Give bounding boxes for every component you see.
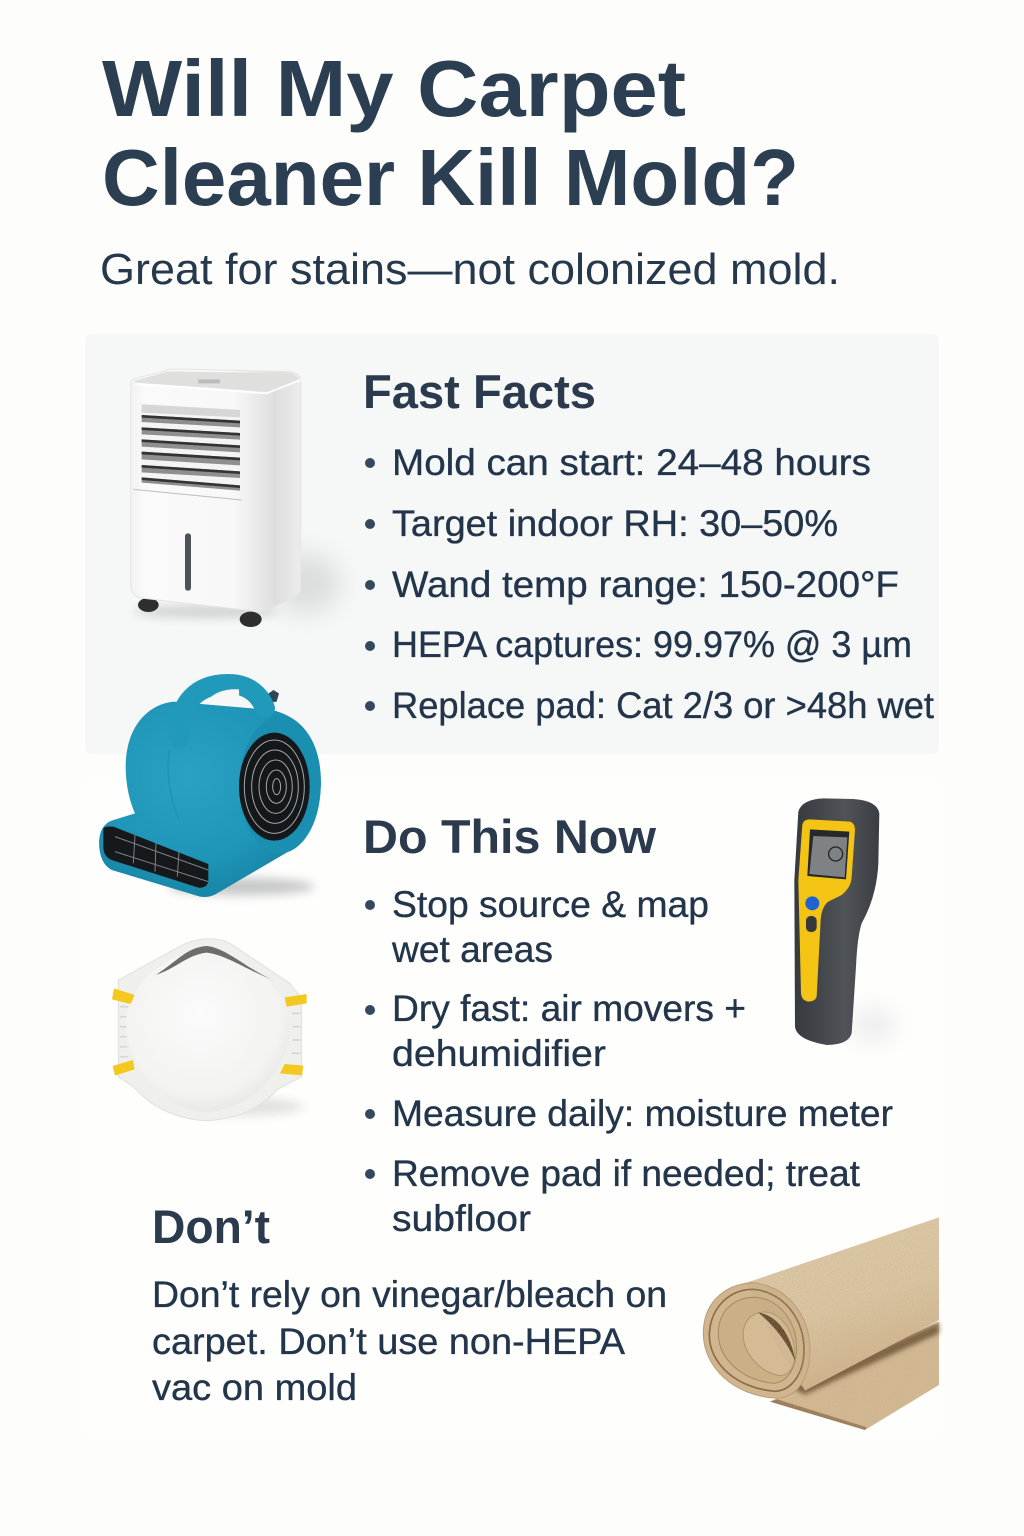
list: fast facts: Wand temp range: 150-200°F (392, 564, 899, 605)
panel: fast facts (85, 334, 939, 754)
subtitle: Great for stains—not colonized mold. (100, 245, 840, 294)
list: do this now: wet areas (391, 929, 553, 970)
title: Cleaner Kill Mold? (102, 133, 799, 222)
list: do this now: Remove pad if needed; treat (392, 1153, 861, 1194)
heading: don't: Don’t (152, 1200, 270, 1253)
list: fast facts: Target indoor RH: 30–50% (392, 503, 838, 544)
icon: air mover (99, 684, 321, 897)
icon: dehumidifier (131, 369, 340, 627)
text: don't: Don’t rely on vinegar/bleach on (152, 1274, 667, 1315)
text: don't (152, 1274, 667, 1408)
list: do this now: dehumidifier (392, 1033, 606, 1074)
list: do this now: Stop source & map (392, 884, 709, 925)
list: fast facts: HEPA captures: 99.97% @ 3 µm (392, 624, 912, 665)
list: fast facts: Replace pad: Cat 2/3 or >48h wet (392, 685, 935, 726)
title (102, 44, 799, 222)
list: do this now: subfloor (392, 1198, 531, 1239)
heading: do this now: Do This Now (363, 810, 656, 863)
icon: carpet roll (703, 1217, 939, 1430)
icon: respirator mask (112, 939, 307, 1121)
text: don't: carpet. Don’t use non-HEPA (152, 1321, 625, 1362)
list: fast facts (365, 442, 935, 726)
list: do this now (365, 884, 893, 1239)
title: Will My Carpet (102, 44, 686, 133)
list: fast facts: Mold can start: 24–48 hours (392, 442, 871, 483)
text: don't: vac on mold (152, 1367, 357, 1408)
icon: moisture meter (794, 798, 893, 1045)
list: do this now: Dry fast: air movers + (392, 988, 746, 1029)
heading: fast facts: Fast Facts (363, 365, 596, 418)
list: do this now: Measure daily: moisture meter (392, 1093, 893, 1134)
panel: do this now (85, 684, 939, 1438)
